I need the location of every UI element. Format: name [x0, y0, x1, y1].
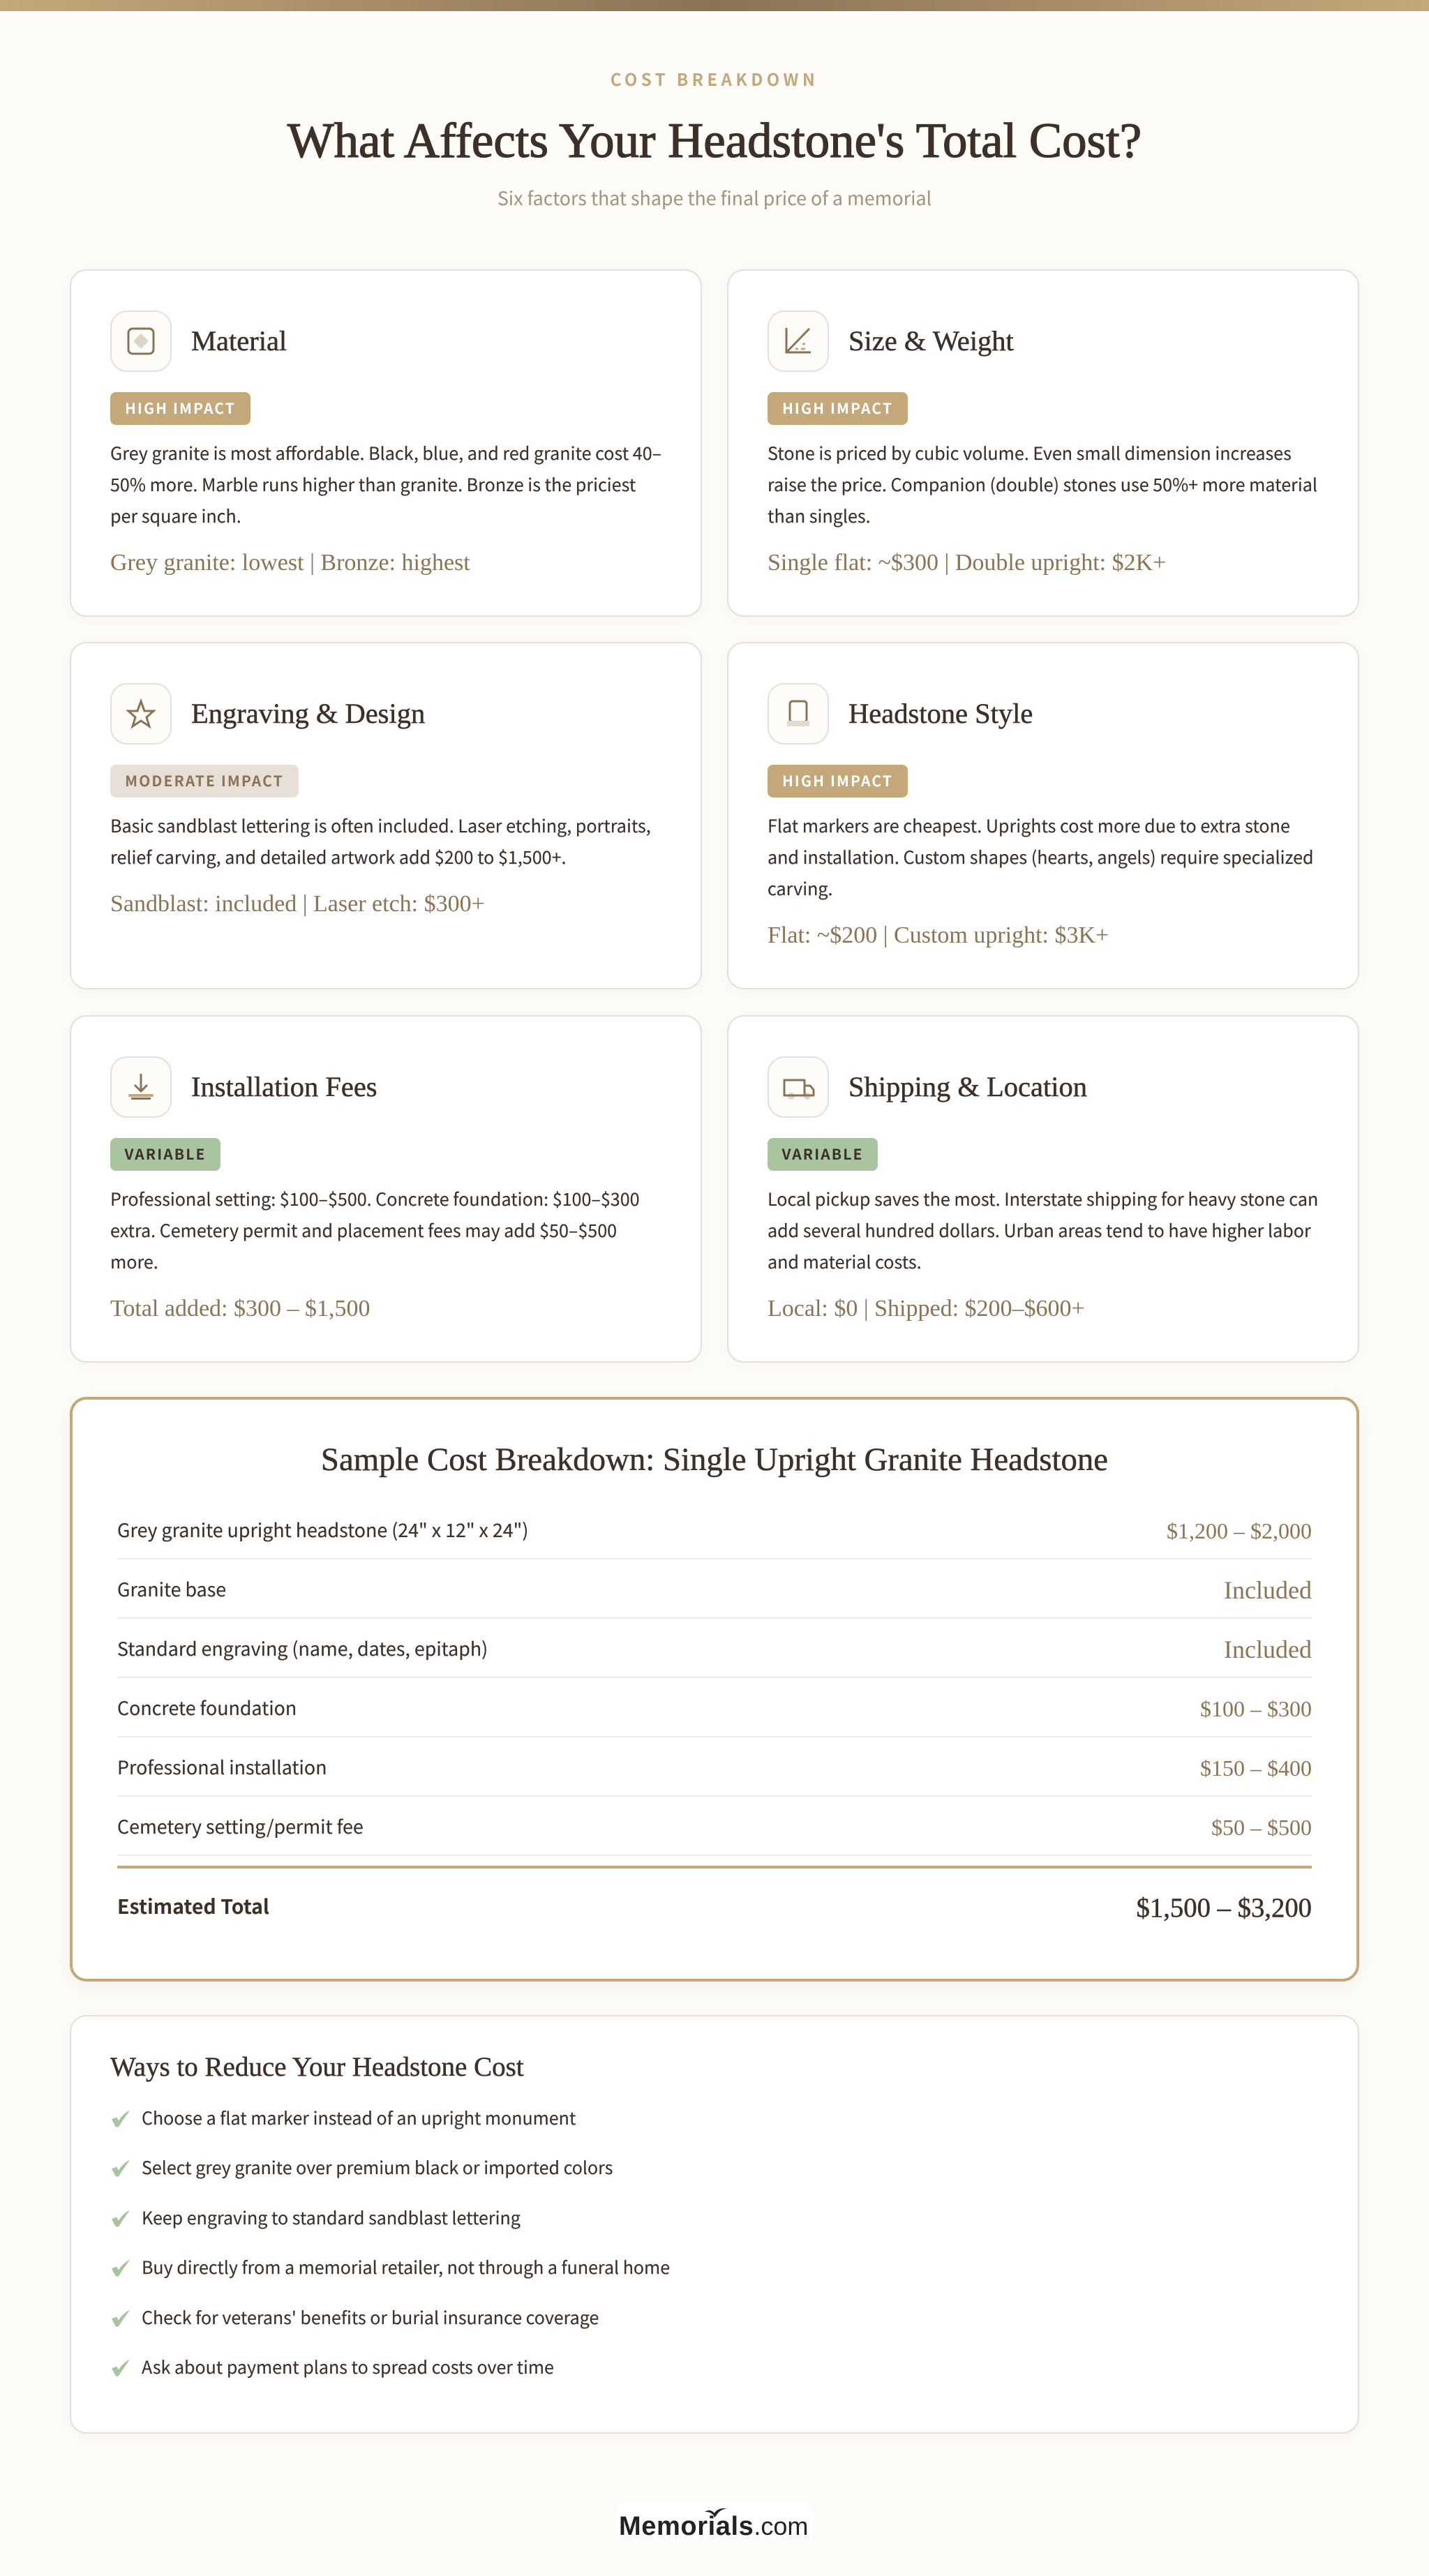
badge: moderate impact: MODERATE IMPACT [125, 770, 284, 791]
icon: star [110, 683, 172, 744]
description: shipping and location: Local pickup saves the most. Interstate shipping for heavy stone can [768, 1186, 1318, 1211]
description: headstone style [768, 813, 1314, 901]
top gradient bar [0, 0, 1429, 11]
badge: high impact: HIGH IMPACT [782, 398, 893, 419]
badge: high impact [768, 392, 908, 425]
description: engraving and design: relief carving, and detailed artwork add $200 to $1,500+. [110, 844, 567, 869]
row: engraving [117, 1619, 1312, 1678]
tip 2: Select grey granite over premium black or imported colors [142, 2155, 613, 2180]
heading: shipping and location: Shipping & Location [848, 1071, 1087, 1102]
card frame: breakdown [70, 1397, 1359, 1982]
description: material: Grey granite is most affordable. Black, blue, and red granite cost 40– [110, 440, 661, 465]
total rule [117, 1866, 1312, 1869]
description: size and weight [768, 440, 1317, 528]
price range: installation fees: Total added: $300 – $1,500 [110, 1296, 371, 1321]
icon: size chart [768, 310, 829, 372]
description: shipping and location: add several hundred dollars. Urban areas tend to have higher labor [768, 1218, 1311, 1243]
badge: moderate impact [110, 765, 299, 797]
icon: truck [768, 1056, 829, 1118]
row: base [117, 1559, 1312, 1619]
tip 4: Buy directly from a memorial retailer, not through a funeral home [142, 2254, 670, 2279]
row: headstone [117, 1500, 1312, 1559]
description: shipping and location: and material costs. [768, 1249, 922, 1274]
total value: $1,500 – $3,200 [1137, 1894, 1312, 1923]
badge: high impact [768, 765, 908, 797]
row: base: Granite base [117, 1575, 226, 1602]
badge: variable: VARIABLE [782, 1144, 863, 1165]
panel: shipping and location [727, 1015, 1359, 1363]
heading: material: Material [191, 325, 287, 357]
heading: installation fees: Installation Fees [191, 1071, 377, 1102]
description: headstone style: Flat markers are cheapest. Uprights cost more due to extra stone [768, 813, 1290, 838]
heading: ways to reduce cost: Ways to Reduce Your Headstone Cost [110, 2052, 524, 2082]
tip 5: Check for veterans' benefits or burial insurance coverage [142, 2305, 599, 2330]
row: foundation: $100 – $300 [1200, 1696, 1312, 1721]
panel: size and weight [727, 269, 1359, 617]
badge: high impact: HIGH IMPACT [782, 770, 893, 791]
row: headstone: $1,200 – $2,000 [1167, 1518, 1312, 1543]
heading: headstone style: Headstone Style [848, 698, 1033, 729]
heading: engraving and design: Engraving & Design [191, 698, 425, 729]
description: material: 50% more. Marble runs higher than granite. Bronze is the priciest [110, 472, 636, 497]
description: size and weight: raise the price. Companion (double) stones use 50%+ more material [768, 472, 1317, 497]
row: permit: $50 – $500 [1211, 1815, 1312, 1840]
heading: breakdown: Sample Cost Breakdown: Single Upright Granite Headstone [321, 1441, 1108, 1478]
description: material [110, 440, 661, 528]
row: permit: Cemetery setting/permit fee [117, 1812, 364, 1839]
row: foundation [117, 1678, 1312, 1737]
description: engraving and design: Basic sandblast lettering is often included. Laser etching, portraits, [110, 813, 651, 838]
price range: material: Grey granite: lowest | Bronze: highest [110, 550, 470, 576]
description: material: per square inch. [110, 503, 241, 528]
description: installation fees: extra. Cemetery permit and placement fees may add $50–$500 [110, 1218, 617, 1243]
panel: material [70, 269, 702, 617]
price range: engraving and design: Sandblast: included | Laser etch: $300+ [110, 891, 485, 917]
icon: material swatch [110, 310, 172, 372]
description: size and weight: Stone is priced by cubic volume. Even small dimension increases [768, 440, 1292, 465]
price range: shipping and location: Local: $0 | Shipped: $200–$600+ [768, 1296, 1085, 1321]
tip 6: Ask about payment plans to spread costs over time [142, 2354, 554, 2379]
logo wordmark: Memorials.com [619, 2512, 808, 2541]
description: headstone style: carving. [768, 876, 833, 901]
tip 1: Choose a flat marker instead of an upright monument [142, 2105, 576, 2130]
panel: engraving and design [70, 642, 702, 989]
description: installation fees: Professional setting: $100–$500. Concrete foundation: $100–$300 [110, 1186, 640, 1211]
panel: headstone style [727, 642, 1359, 989]
panel: installation fees [70, 1015, 702, 1363]
title: What Affects Your Headstone's Total Cost? [287, 114, 1142, 168]
icon: logo bird [705, 2508, 727, 2517]
row: engraving: Standard engraving (name, dates, epitaph) [117, 1634, 488, 1661]
icon: installation arrow [110, 1056, 172, 1118]
icon: headstone [768, 683, 829, 744]
description: headstone style: and installation. Custom shapes (hearts, angels) require specialized [768, 844, 1314, 869]
description: size and weight: than singles. [768, 503, 871, 528]
row: engraving: Included [1224, 1635, 1312, 1663]
badge: variable [110, 1138, 220, 1171]
price range: size and weight: Single flat: ~$300 | Double upright: $2K+ [768, 550, 1166, 576]
row: permit [117, 1797, 1312, 1856]
logo: Memorials.com [617, 2504, 812, 2539]
badge: high impact [110, 392, 250, 425]
row: installation: Professional installation [117, 1753, 327, 1780]
total label: Estimated Total [117, 1892, 269, 1920]
row: foundation: Concrete foundation [117, 1693, 297, 1721]
tip 3: Keep engraving to standard sandblast lettering [142, 2205, 521, 2230]
badge: variable: VARIABLE [125, 1144, 206, 1165]
description: installation fees: more. [110, 1249, 158, 1274]
description: shipping and location [768, 1186, 1318, 1274]
badge: high impact: HIGH IMPACT [125, 398, 236, 419]
panel: ways to reduce cost [70, 2015, 1359, 2434]
description: installation fees [110, 1186, 640, 1274]
row: headstone: Grey granite upright headstone (24" x 12" x 24") [117, 1515, 528, 1543]
subtitle: Six factors that shape the final price of a memorial [497, 184, 932, 211]
row: installation [117, 1737, 1312, 1797]
row: installation: $150 – $400 [1200, 1755, 1312, 1781]
heading: size and weight: Size & Weight [848, 325, 1014, 357]
eyebrow label: COST BREAKDOWN [611, 66, 818, 91]
row: base: Included [1224, 1576, 1312, 1604]
price range: headstone style: Flat: ~$200 | Custom upright: $3K+ [768, 922, 1109, 948]
description: engraving and design [110, 813, 651, 869]
badge: variable [768, 1138, 878, 1171]
